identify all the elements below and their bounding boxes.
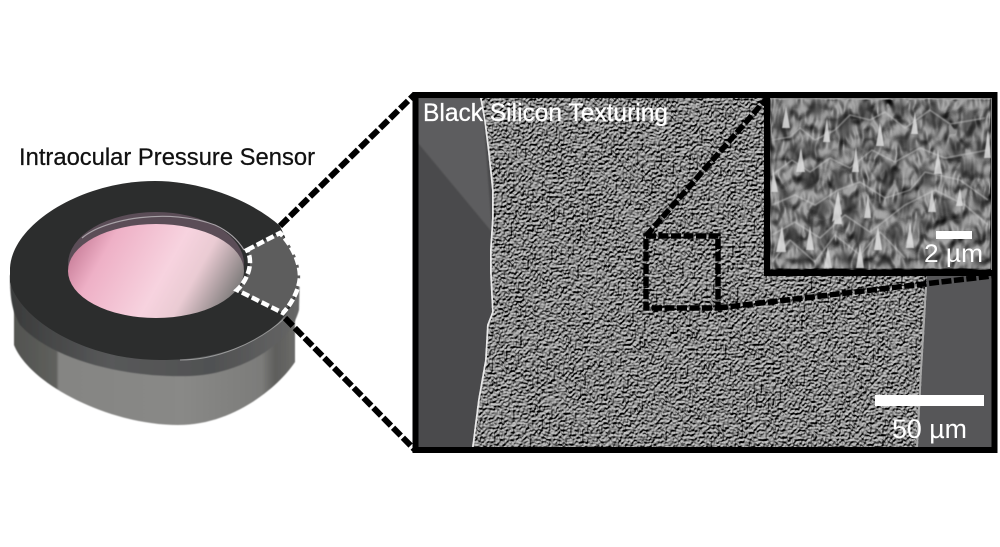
inset: high magnification SEM [767,95,994,273]
selection square and zoom lines to inset [646,97,992,308]
illustration: pressure sensor device [10,181,300,425]
heading: Intraocular Pressure Sensor: Intraocular Pressure Sensor [19,144,315,171]
magnified sector [237,233,300,313]
panel title: Black Silicon Texturing [423,99,668,127]
substrate left upper [416,96,496,448]
panel border [416,95,994,450]
scale bar 50 µm [875,395,984,444]
substrate right [900,276,992,448]
device top ring [10,181,300,360]
lens recess [68,212,244,316]
inset spikes [771,106,991,268]
lens: pink membrane [68,224,244,318]
device lower body [14,300,295,425]
device rim [10,270,300,376]
inset ridges [772,110,988,262]
zoom lines from device to panel [280,94,415,450]
textured silicon surface [465,96,935,448]
inset border [767,95,994,273]
SEM panel: black silicon texturing [416,96,992,448]
rim highlight [180,318,285,360]
infographic [9,92,998,453]
inset pits [775,100,988,266]
scale bar 50 µm: 50 µm [892,414,967,444]
scale bar 2 µm: 2 µm [924,240,983,268]
sector dashed outline [237,233,300,313]
